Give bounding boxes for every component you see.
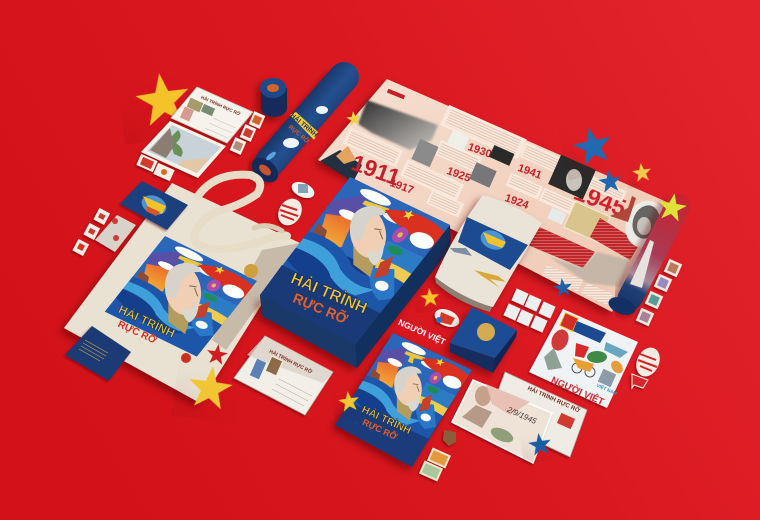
star on tube: [656, 191, 689, 222]
brochure artwork: [343, 333, 472, 449]
rolled paper highlight: [630, 240, 654, 288]
postcard address lines: [205, 118, 236, 138]
sheet monument: [598, 369, 616, 387]
stamps: six grid: [503, 288, 556, 333]
box title: HẢI TRÌNH: [288, 268, 370, 317]
poster logo: [387, 89, 405, 99]
lotus: [489, 425, 515, 445]
map land: [170, 130, 183, 157]
tote title: RỰC RỠ: [116, 317, 159, 347]
brochure portrait: [391, 366, 425, 421]
tote shadow from box: [212, 243, 300, 350]
sheet logo: [573, 321, 606, 343]
year 1945: 1945: [570, 179, 630, 222]
stamps: right column: [636, 259, 682, 326]
sheet balloon: [609, 358, 625, 376]
poster text blocks: [343, 105, 627, 218]
poster photo: ship: [320, 146, 362, 182]
sticker sheet: [529, 309, 638, 408]
year 1924: 1924: [503, 192, 531, 212]
year 1930: 1930: [466, 141, 493, 161]
towel band: [458, 217, 528, 270]
heading: HẢI TRÌNH RỰC RỠ: [268, 347, 314, 376]
poster small photos: [411, 130, 610, 243]
stamp card: [95, 215, 136, 252]
postcard heading: HẢI TRÌNH RỰC RỠ: [200, 93, 242, 117]
logo sticker: nguoi viet: NGƯỜI VIỆT: [397, 316, 448, 347]
star: blue on poster: [552, 277, 574, 297]
poster lower notes: [542, 265, 613, 305]
sheet boat: [604, 342, 628, 358]
brochure lower panel: [335, 402, 429, 467]
star: red on tote: [205, 343, 229, 365]
stickers right: [632, 344, 664, 388]
sticker: slogan: [632, 344, 664, 380]
gift box: hai trinh: [260, 177, 451, 368]
box lower panel: [260, 265, 382, 345]
tube artwork: [265, 106, 328, 162]
year 1911: 1911: [348, 149, 404, 191]
star: yellow right: [631, 162, 653, 182]
star: large yellow: [133, 70, 193, 127]
small blue container: [260, 78, 287, 117]
small badge and stamps: [419, 430, 456, 481]
year 1917: 1917: [388, 177, 415, 197]
tote bag: [64, 175, 300, 403]
gold medallion: [477, 323, 495, 341]
postcard: lower centre: [234, 336, 333, 415]
date: 2/9/1945: [505, 405, 538, 426]
postcard stamps: [180, 98, 215, 122]
sheet hat: [587, 351, 607, 363]
year 1941: 1941: [516, 162, 543, 182]
star: yellow by brochure: [337, 390, 361, 412]
sticker: slogan: [273, 194, 307, 230]
sheet rider: [572, 358, 595, 377]
towel roll: [435, 195, 542, 312]
blue gift box: [450, 307, 517, 373]
postcard: portrait: [452, 380, 552, 463]
card gold text: [79, 340, 108, 361]
tote handles: [195, 175, 287, 249]
sheet flag: [575, 343, 589, 358]
tote title: [111, 301, 178, 352]
towel embroidery: boat: [450, 248, 472, 256]
card logo: [138, 191, 170, 219]
tube base: [606, 294, 638, 318]
sheet small: [544, 348, 562, 370]
tote badge: [181, 353, 191, 363]
sticker: boat colourful: [432, 305, 462, 331]
sheet caption: VIỆT NAM: [596, 381, 619, 396]
box title: [282, 268, 370, 332]
poster photo: harbour: [358, 100, 438, 150]
postcard: map: [141, 121, 226, 178]
tube artwork: HẢI TRÌNH: [289, 111, 320, 139]
box artwork: [273, 177, 450, 326]
poster red panels: [528, 218, 640, 268]
poster crowd photo: [550, 252, 630, 287]
star: small yellow on poster: [345, 110, 362, 126]
tube end: [247, 153, 283, 187]
map beach: [178, 158, 210, 173]
postcard heading: HẢI TRÌNH RỰC RỠ: [526, 384, 582, 415]
box side: [355, 225, 451, 368]
wash flag: [486, 384, 530, 415]
towel embroidery: plane: [474, 270, 506, 288]
tube artwork: RỰC RỠ: [287, 124, 311, 146]
sheet slogan: [548, 327, 572, 353]
navy logo card: [120, 181, 188, 230]
poster: timeline: [318, 79, 671, 312]
stamps group near postcards: [136, 111, 265, 181]
tote portrait: [161, 262, 205, 334]
postcard stamp: [556, 412, 576, 430]
map ship: [150, 128, 174, 158]
tote title: HẢI TRÌNH: [116, 301, 178, 341]
sticker: monument: [289, 179, 317, 201]
tote artwork: [105, 236, 257, 357]
poster tube right: [606, 191, 689, 318]
sheet wordmark: NGƯỜI VIỆT: [549, 374, 606, 408]
small stamps left: [72, 208, 136, 256]
band logo: [477, 226, 509, 254]
gift box lid: [450, 307, 517, 358]
year 1925: 1925: [445, 165, 472, 185]
tall blue tube: [247, 77, 344, 187]
brochure title: RỰC RỠ: [361, 417, 399, 442]
navy card on tote: [65, 326, 131, 381]
stamp orange: [427, 448, 451, 468]
poster tower: [610, 196, 636, 222]
brochure title: HẢI TRÌNH: [360, 403, 413, 437]
postcard: stamps back: [171, 87, 253, 143]
stamp green: [419, 461, 443, 481]
star: yellow on tote corner: [186, 363, 235, 410]
box lid: [260, 177, 450, 345]
poster portrait oval: [619, 195, 671, 253]
star: blue large: [570, 123, 615, 167]
tote medal: [244, 264, 258, 278]
sticker: flag: [632, 374, 648, 388]
badge: [443, 430, 456, 446]
postcard: address right: [488, 372, 587, 457]
portrait sketch: [462, 386, 492, 428]
stickers: small: [273, 179, 317, 230]
postcard stamps: [250, 356, 283, 379]
box title: RỰC RỠ: [291, 289, 351, 327]
address lines: [272, 379, 312, 406]
star: yellow below towel: [420, 287, 440, 307]
star: blue on postcard: [527, 432, 553, 456]
star: blue medium: [597, 169, 623, 193]
brochure: [335, 333, 472, 467]
sheet emblem: [560, 313, 578, 331]
box portrait: [346, 205, 390, 277]
